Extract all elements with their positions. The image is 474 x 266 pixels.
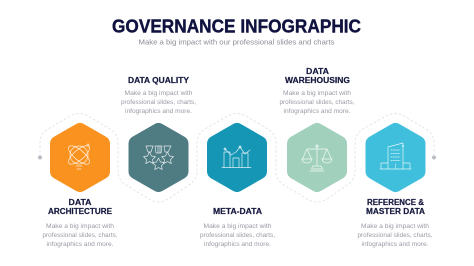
hexagon: cyan <box>374 131 418 184</box>
description <box>200 223 275 248</box>
left endpoint dot <box>38 156 42 160</box>
dashed connector <box>40 114 434 202</box>
title: GOVERNANCE INFOGRAPHIC <box>112 16 361 36</box>
heading: DATA <box>68 198 92 207</box>
hexagon: blue teal <box>215 131 259 184</box>
heading: REFERENCE & <box>367 198 424 207</box>
heading <box>366 198 425 216</box>
heading: DATA <box>306 67 329 76</box>
description: Make a big impact with <box>124 90 193 97</box>
heading: META-DATA <box>213 207 262 216</box>
description: Make a big impact with <box>46 223 115 230</box>
description: professional slides, charts, <box>42 232 118 239</box>
hexagon: slate teal <box>136 131 180 184</box>
heading: WAREHOUSING <box>285 76 350 85</box>
icon: medal stars <box>144 146 174 170</box>
hexagon: orange <box>58 131 102 184</box>
description <box>121 90 196 115</box>
heading: ARCHITECTURE <box>48 207 113 216</box>
step: meta-data <box>200 131 275 248</box>
step: reference and master data <box>358 131 433 248</box>
description <box>358 223 433 248</box>
icon: bar chart with line <box>222 146 251 168</box>
icon: atom light bulb <box>66 143 92 169</box>
step: data warehousing <box>280 67 355 184</box>
step: data architecture <box>42 131 118 248</box>
description: Make a big impact with <box>283 90 352 97</box>
subtitle: Make a big impact with our professional slides and charts <box>138 38 335 46</box>
description <box>280 90 355 115</box>
right endpoint dot <box>432 156 436 160</box>
description: Make a big impact with <box>361 223 430 230</box>
description: Make a big impact with <box>204 223 272 230</box>
description: infographics and more. <box>362 241 429 248</box>
description: infographics and more. <box>204 241 271 248</box>
description: professional slides, charts, <box>358 232 433 239</box>
description <box>42 223 118 248</box>
description: professional slides, charts, <box>200 232 275 239</box>
description: professional slides, charts, <box>280 99 355 106</box>
step: data quality <box>121 76 196 184</box>
heading: MASTER DATA <box>366 207 425 216</box>
heading <box>285 67 350 85</box>
hexagon: mint <box>295 131 339 184</box>
description: infographics and more. <box>125 108 192 115</box>
description: infographics and more. <box>46 241 114 248</box>
heading: DATA QUALITY <box>128 76 190 85</box>
heading <box>48 198 113 216</box>
description: professional slides, charts, <box>121 99 196 106</box>
description: infographics and more. <box>284 108 351 115</box>
icon: office building <box>380 143 411 169</box>
icon: balance scales <box>302 145 332 171</box>
